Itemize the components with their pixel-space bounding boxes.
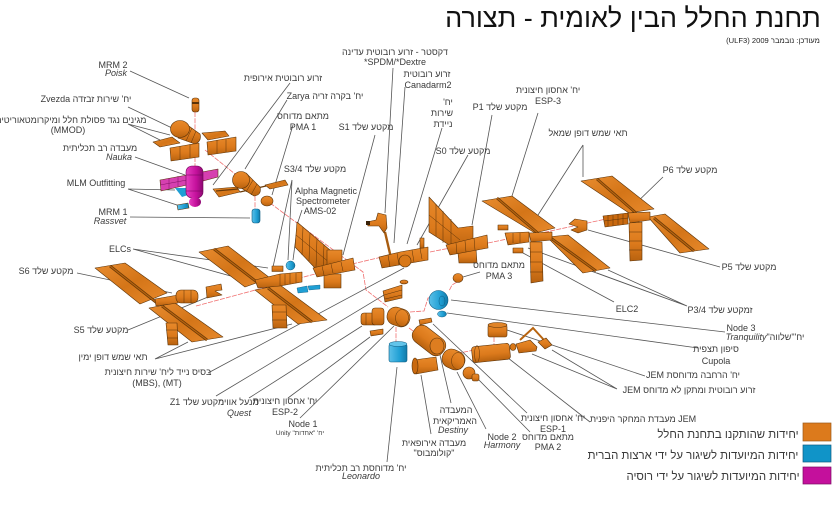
labels: top centre: Alpha Magnetic — [295, 186, 358, 196]
labels: bottom centre: האמריקאית — [433, 416, 477, 426]
labels: top centre: מקטע שלד P1 — [473, 102, 527, 112]
labels: starboard side: יח' אחסון חיצונית — [253, 396, 317, 406]
labels: top centre — [244, 47, 717, 216]
labels: Russian segment: MRM 1 — [98, 207, 128, 217]
legend: US launch modules — [588, 445, 831, 462]
labels: starboard side: בסיס נייד ליח' שירות חיצונית — [105, 367, 212, 377]
module: Cupola — [438, 311, 446, 317]
truss S1 with radiators — [295, 222, 355, 288]
labels: top centre: מקטע שלד P6 — [663, 165, 717, 175]
module: PMA 2 — [463, 367, 479, 381]
leader lines — [77, 68, 725, 462]
labels: starboard side: מקטע שלד S5 — [74, 325, 128, 335]
labels: bottom centre: Harmony — [484, 440, 521, 450]
labels: starboard side: יח' "אחדות" Unity — [276, 430, 324, 437]
labels: starboard side: ESP-2 — [272, 407, 298, 417]
labels: top centre: יח' — [443, 97, 453, 107]
labels: top centre: מקטע שלד S0 — [436, 146, 490, 156]
labels: port side: מתאם מדוחס — [473, 260, 525, 270]
module: JEM pressurized module — [471, 343, 511, 363]
module: Quest airlock — [361, 308, 384, 325]
labels: port side: מקטע שלד P5 — [722, 262, 776, 272]
legend: installed modules: יחידות שהותקנו בתחנת החלל — [657, 428, 799, 441]
labels: Russian segment: מגינים נגד פסולת חלל ומיקרומטאוריטים — [0, 115, 146, 125]
Dextre robot — [366, 213, 387, 233]
labels: Japanese and node 3: זרוע רובוטית ומתקן לא מדוחס JEM — [623, 385, 756, 395]
module: PMA 3 — [453, 274, 463, 282]
module: Leonardo — [389, 342, 407, 362]
labels: Russian segment: Nauka — [106, 152, 132, 162]
labels: bottom centre: יח' אחסון חיצונית — [521, 413, 585, 423]
labels: bottom centre: Leonardo — [342, 471, 380, 481]
labels: Japanese and node 3: סיפון תצפית — [693, 344, 739, 354]
labels: top centre: יח' אחסון חיצונית — [516, 85, 580, 95]
truss S5 — [206, 284, 222, 298]
labels: starboard side: מקטע שלד S6 — [19, 266, 73, 276]
truss S0 and mobile base — [379, 232, 428, 268]
labels: top centre: זרוע רובוטית אירופית — [244, 73, 322, 83]
labels: starboard side — [19, 244, 324, 437]
labels: Russian segment: MLM Outfitting — [67, 178, 125, 188]
labels: starboard side: (MBS), (MT) — [132, 378, 182, 388]
labels: top centre: AMS-02 — [304, 206, 336, 216]
starboard array S6 — [95, 263, 223, 345]
labels: starboard side: תאי שמש דופן ימין — [78, 352, 148, 362]
labels: Russian segment: יח' שירות זבזדה Zvezda — [41, 94, 131, 104]
labels: Russian segment: Poisk — [105, 68, 128, 78]
labels: top centre: שירות — [431, 108, 454, 118]
module: Nauka laboratory — [160, 166, 218, 207]
labels: top centre: *SPDM/*Dextre — [364, 57, 426, 67]
labels: bottom centre: Destiny — [438, 425, 469, 435]
labels: port side: זמקטע שלד P3/4 — [687, 305, 753, 315]
port array P3/4 — [482, 196, 610, 283]
module: MRM 1 Rassvet — [252, 209, 260, 223]
labels: starboard side: Quest — [227, 408, 252, 418]
labels: top centre: ESP-3 — [535, 96, 561, 106]
labels: bottom centre: "קולומבוס" — [414, 448, 454, 458]
labels: top centre: מקטע שלד S3/4 — [284, 164, 346, 174]
module: Columbus — [412, 357, 438, 374]
labels: top centre: מתאם מדוחס — [277, 111, 329, 121]
labels: top centre: דקסטר - זרוע רובוטית עדינה — [342, 47, 448, 57]
truss P5 — [569, 219, 587, 233]
labels: Russian segment: MRM 2 — [98, 60, 128, 70]
pressurised connection lines — [195, 112, 606, 356]
module: Node 1 Unity — [385, 305, 412, 329]
labels: Japanese and node 3 — [590, 323, 804, 424]
labels: bottom centre: מעבדה אירופאית — [402, 438, 466, 448]
module: Zvezda with solar arrays — [153, 120, 236, 161]
labels: top centre: Spectrometer — [296, 196, 350, 206]
labels: Japanese and node 3: יח' הרחבה מדוחסת JEM — [646, 370, 740, 380]
labels: port side — [473, 260, 776, 315]
labels: Japanese and node 3: JEM מעבדת המחקר היפנית — [590, 414, 696, 424]
labels: starboard side: מקטע שלד Z1 — [170, 397, 224, 407]
legend: US launch modules: יחידות המיועדות לשיגור על ידי ארצות הברית — [588, 449, 798, 462]
labels: Japanese and node 3: Cupola — [702, 356, 730, 366]
labels: starboard side: מנעל אוויר — [219, 397, 259, 407]
truss P1 with radiators — [429, 197, 488, 263]
port array P6 — [581, 176, 709, 261]
labels: Japanese and node 3: יח'"שלווה"Tranquility — [726, 332, 804, 342]
module: JEM logistics module — [488, 322, 507, 337]
legend: Russian launch modules — [626, 467, 831, 484]
labels: starboard side: ELCs — [109, 244, 132, 254]
labels: Russian segment: מעבדה רב תכליתית — [63, 143, 137, 153]
labels: bottom centre: PMA 2 — [535, 442, 561, 452]
labels: starboard side: Node 1 — [288, 419, 318, 429]
labels: top centre: PMA 1 — [290, 122, 316, 132]
module: MRM 2 Poisk — [192, 98, 199, 112]
labels: top centre: ניידת — [433, 119, 453, 129]
labels: top centre: מקטע שלד S1 — [339, 122, 393, 132]
module: Node 2 Harmony — [439, 346, 468, 373]
module: Node 3 Tranquility — [429, 290, 448, 310]
labels: Russian segment — [0, 60, 146, 226]
legend — [588, 423, 831, 484]
update note: מעודכן: נובמבר 2009 (ULF3) — [726, 36, 820, 45]
labels: top centre: יח' בקרה זריה Zarya — [287, 91, 363, 101]
legend: Russian launch modules: יחידות המיועדות לשיגור על ידי רוסיה — [626, 470, 800, 483]
module: ESP-2 — [370, 329, 383, 336]
JEM robotic arm and exposed facility — [510, 328, 552, 353]
starboard array S3/4 — [199, 246, 327, 328]
labels: bottom centre: יח' מדוחסת רב תכליתית — [316, 463, 406, 473]
labels: bottom centre: ESP-1 — [540, 424, 566, 434]
module: Destiny — [409, 322, 449, 359]
labels: port side: PMA 3 — [486, 271, 512, 281]
labels: top centre: זרוע רובוטית — [404, 69, 451, 79]
module: Zarya with arrays — [213, 172, 288, 197]
labels: bottom centre: המעבדה — [440, 405, 472, 415]
title: תחנת החלל הבין לאומית - תצורה — [445, 3, 821, 33]
labels: Russian segment: Rassvet — [94, 216, 127, 226]
labels: bottom centre: Node 2 — [487, 432, 517, 442]
module: ESP-1 — [419, 318, 432, 325]
labels: Russian segment: (MMOD) — [51, 125, 85, 135]
module: MLM outfitting — [177, 203, 189, 210]
labels: top centre: Canadarm2 — [404, 80, 452, 90]
labels: port side: ELC2 — [616, 304, 638, 314]
legend: installed modules — [657, 423, 831, 441]
labels: bottom centre: מתאם מדוחס — [522, 432, 574, 442]
module: PMA 1 — [261, 196, 273, 206]
truss Z1 — [383, 280, 408, 302]
AMS-02 and stowed carriers — [286, 261, 320, 293]
labels: bottom centre — [316, 405, 585, 481]
labels: Japanese and node 3: Node 3 — [726, 323, 756, 333]
labels: top centre: תאי שמש דופן שמאל — [548, 128, 628, 138]
